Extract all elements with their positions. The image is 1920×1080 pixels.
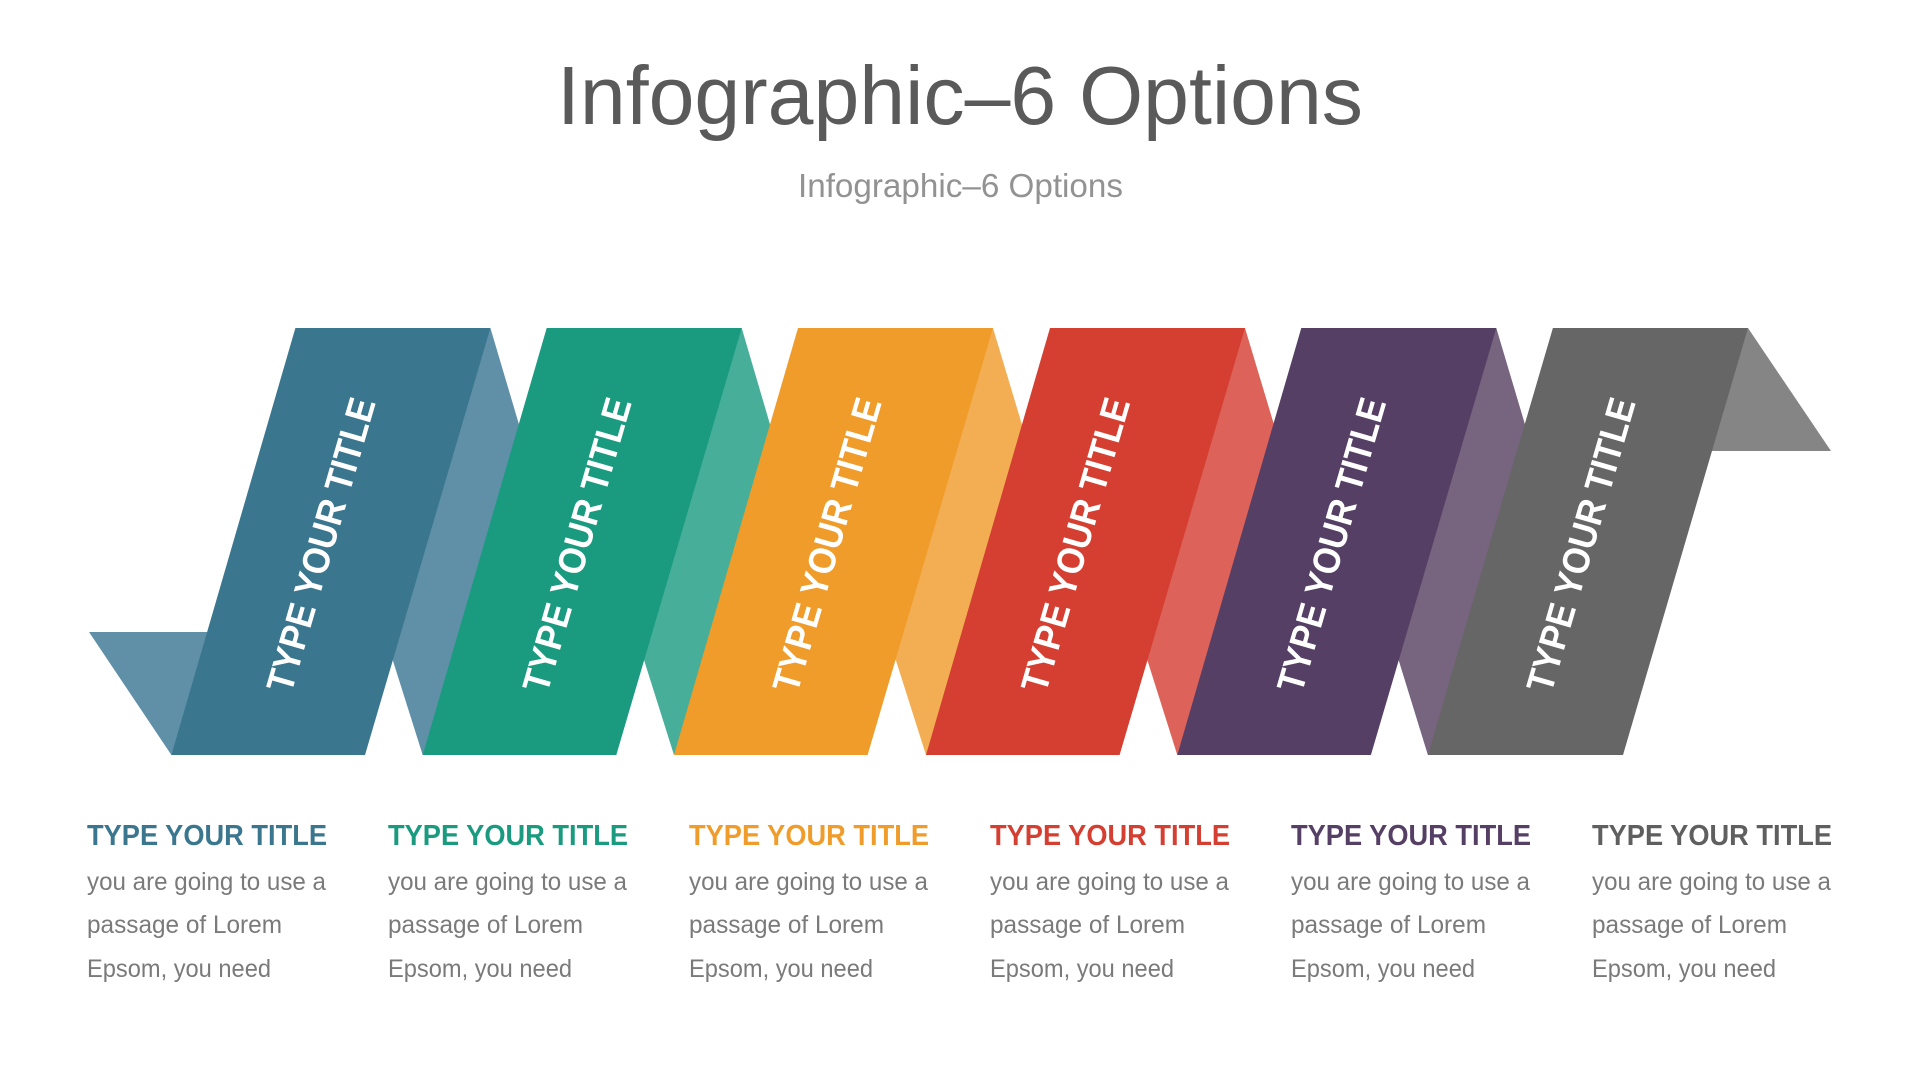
text block: column 2: TYPE YOUR TITLE	[388, 820, 628, 852]
fold: blue	[380, 328, 523, 755]
text block: column 6: passage of Lorem	[1592, 911, 1787, 939]
ribbon: orange: TYPE YOUR TITLE	[765, 393, 891, 697]
fold: green	[631, 328, 774, 755]
ribbon: purple: TYPE YOUR TITLE	[1270, 393, 1395, 697]
text block: column 1: TYPE YOUR TITLE	[87, 820, 327, 852]
text block: column 2: you are going to use a	[388, 868, 627, 896]
text block: column 2: Epsom, you need	[388, 955, 572, 983]
text block: column 3: TYPE YOUR TITLE	[689, 820, 929, 852]
text block: column 6: TYPE YOUR TITLE	[1592, 820, 1832, 852]
ribbon: blue: TYPE YOUR TITLE	[259, 393, 385, 697]
text block: column 1	[87, 820, 327, 983]
text block: column 6: you are going to use a	[1592, 868, 1831, 896]
text block: column 3: you are going to use a	[689, 868, 928, 896]
right tail fold	[1700, 328, 1831, 451]
text block: column 5: TYPE YOUR TITLE	[1291, 820, 1531, 852]
ribbon: blue	[171, 328, 490, 755]
text block: column 5: Epsom, you need	[1291, 955, 1475, 983]
text block: column 1: Epsom, you need	[87, 955, 271, 983]
text block: column 4: you are going to use a	[990, 868, 1229, 896]
fold: red	[1135, 328, 1278, 755]
text block: column 4: TYPE YOUR TITLE	[990, 820, 1230, 852]
text block: column 1: you are going to use a	[87, 868, 326, 896]
ribbon: green	[423, 328, 742, 755]
text block: column 4: passage of Lorem	[990, 911, 1185, 939]
text block: column 1: passage of Lorem	[87, 911, 282, 939]
text block: column 6: Epsom, you need	[1592, 955, 1776, 983]
text block: column 3: Epsom, you need	[689, 955, 873, 983]
ribbon: orange	[674, 328, 993, 755]
subtitle: Infographic–6 Options	[798, 167, 1123, 204]
ribbon: red: TYPE YOUR TITLE	[1014, 393, 1139, 697]
ribbon: green: TYPE YOUR TITLE	[515, 393, 641, 697]
ribbon: grey	[1428, 328, 1748, 755]
ribbon: red	[926, 328, 1245, 755]
left tail fold	[89, 632, 215, 755]
text block: column 4	[990, 820, 1230, 983]
ribbon chart	[89, 328, 1831, 755]
fold: purple	[1386, 328, 1529, 755]
text block: column 3	[689, 820, 929, 983]
fold: orange	[883, 328, 1026, 755]
text block: column 5: passage of Lorem	[1291, 911, 1486, 939]
text block: column 5: you are going to use a	[1291, 868, 1530, 896]
text block: column 3: passage of Lorem	[689, 911, 884, 939]
text block: column 4: Epsom, you need	[990, 955, 1174, 983]
text block: column 6	[1592, 820, 1832, 983]
text block: column 2	[388, 820, 628, 983]
ribbon: grey: TYPE YOUR TITLE	[1519, 393, 1645, 697]
text block: column 5	[1291, 820, 1531, 983]
text block: column 2: passage of Lorem	[388, 911, 583, 939]
title: Infographic–6 Options	[557, 49, 1363, 142]
ribbon: purple	[1177, 328, 1496, 755]
